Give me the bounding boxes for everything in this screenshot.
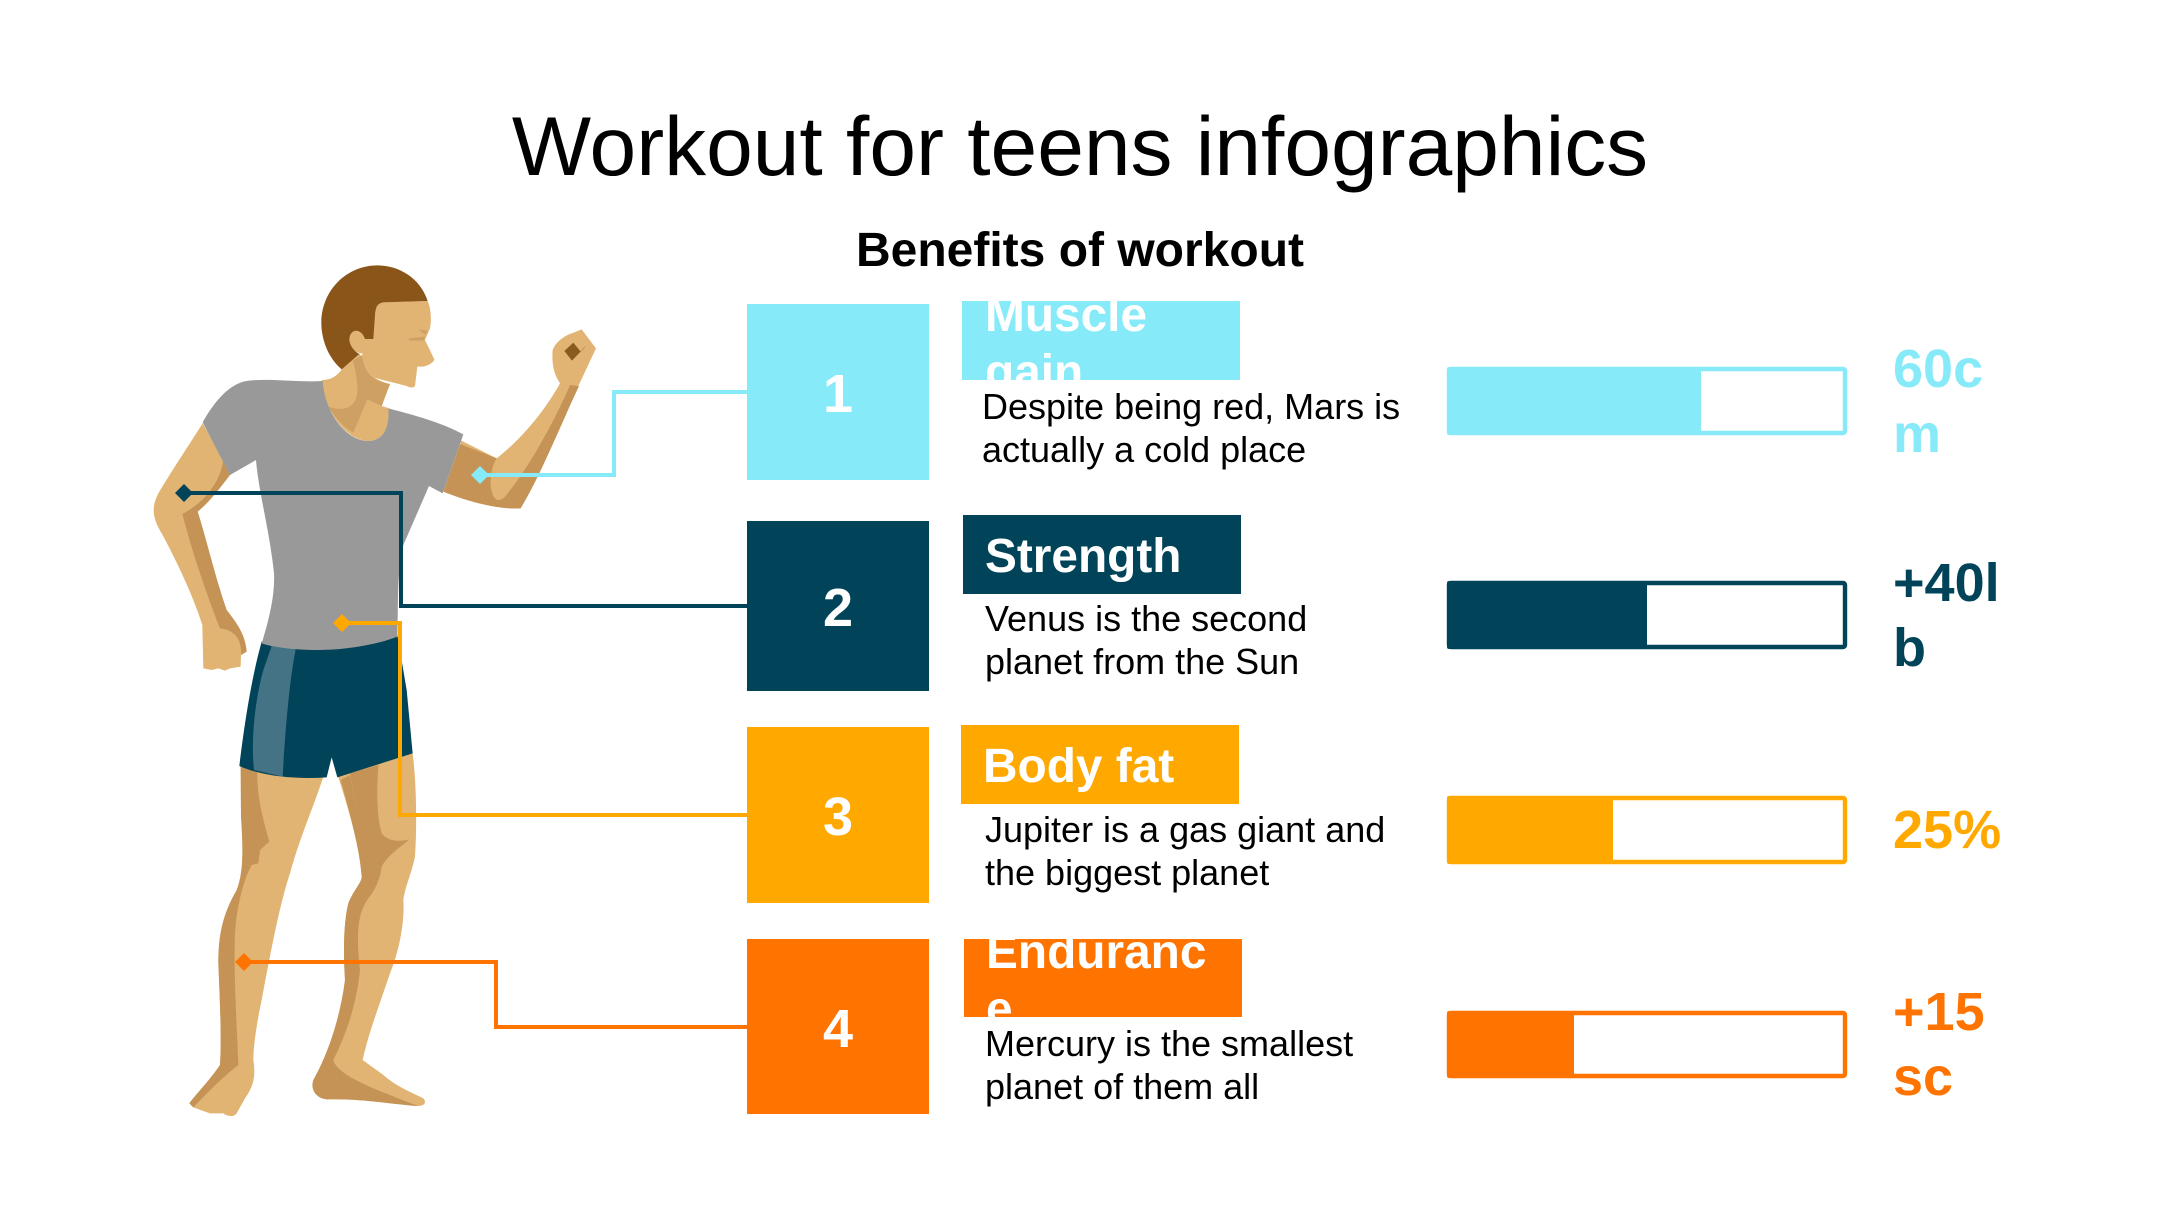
number box 3 bbox=[747, 727, 929, 903]
description 1: Despite being red, Mars is bbox=[982, 386, 1400, 427]
description 2 bbox=[985, 598, 1307, 682]
neck bbox=[322, 353, 390, 441]
connector line 1 bbox=[471, 392, 747, 484]
value 3: 25% bbox=[1893, 800, 2001, 860]
shorts bbox=[239, 635, 413, 778]
connector line 3 bbox=[333, 614, 747, 815]
value 1: 60c bbox=[1893, 339, 1983, 399]
description 1: actually a cold place bbox=[982, 429, 1306, 470]
value 2 bbox=[1893, 553, 2000, 678]
illustration: athlete figure bbox=[154, 265, 596, 1116]
number box 2 bbox=[747, 521, 929, 691]
panel: body fat bbox=[747, 725, 2001, 903]
panel: muscle gain bbox=[747, 289, 1983, 480]
left arm bbox=[154, 423, 247, 671]
description 2: planet from the Sun bbox=[985, 641, 1299, 682]
description 4: planet of them all bbox=[985, 1066, 1259, 1107]
number box 1 bbox=[747, 304, 929, 480]
value 4: +15 bbox=[1893, 982, 1985, 1042]
heading: muscle gain: Muscle bbox=[985, 289, 1147, 342]
heading: body fat: Body fat bbox=[983, 740, 1174, 793]
connector line 2 bbox=[175, 484, 747, 606]
description 4: Mercury is the smallest bbox=[985, 1023, 1353, 1064]
connector line 4 bbox=[235, 953, 747, 1027]
description 3: the biggest planet bbox=[985, 852, 1269, 893]
value 1 bbox=[1893, 339, 1983, 464]
panel: strength bbox=[747, 515, 2000, 691]
progress bar 1 bbox=[1447, 367, 1845, 435]
title: Workout for teens infographics bbox=[512, 99, 1648, 193]
number box 1: 1 bbox=[823, 364, 853, 424]
heading: muscle gain bbox=[962, 301, 1240, 380]
panel: endurance bbox=[747, 926, 1985, 1114]
heading: strength bbox=[963, 515, 1241, 594]
value 4 bbox=[1893, 982, 1985, 1107]
shirt bbox=[203, 380, 463, 650]
progress bar 2 bbox=[1447, 581, 1845, 649]
heading: strength: Strength bbox=[985, 530, 1182, 583]
heading: endurance: Enduranc bbox=[986, 926, 1206, 979]
description 3: Jupiter is a gas giant and bbox=[985, 809, 1385, 850]
number box 4: 4 bbox=[823, 999, 853, 1059]
description 2: Venus is the second bbox=[985, 598, 1307, 639]
heading: muscle gain: gain bbox=[985, 346, 1083, 399]
progress bar 4 bbox=[1447, 1011, 1845, 1078]
value 2: b bbox=[1893, 618, 1926, 678]
subtitle: Benefits of workout bbox=[856, 224, 1304, 277]
left leg bbox=[189, 763, 323, 1116]
heading: body fat bbox=[961, 725, 1239, 804]
heading: endurance bbox=[964, 939, 1242, 1017]
value 4: sc bbox=[1893, 1047, 1953, 1107]
description 3 bbox=[985, 809, 1385, 893]
description 4 bbox=[985, 1023, 1353, 1107]
number box 2: 2 bbox=[823, 578, 853, 638]
value 1: m bbox=[1893, 404, 1941, 464]
description 1 bbox=[982, 386, 1400, 470]
right leg bbox=[312, 753, 425, 1106]
number box 4 bbox=[747, 939, 929, 1114]
right arm bbox=[443, 329, 596, 509]
head bbox=[321, 265, 434, 388]
value 2: +40l bbox=[1893, 553, 2000, 613]
progress bar 3 bbox=[1447, 796, 1845, 864]
number box 3: 3 bbox=[823, 787, 853, 847]
heading: endurance: e bbox=[986, 983, 1013, 1036]
